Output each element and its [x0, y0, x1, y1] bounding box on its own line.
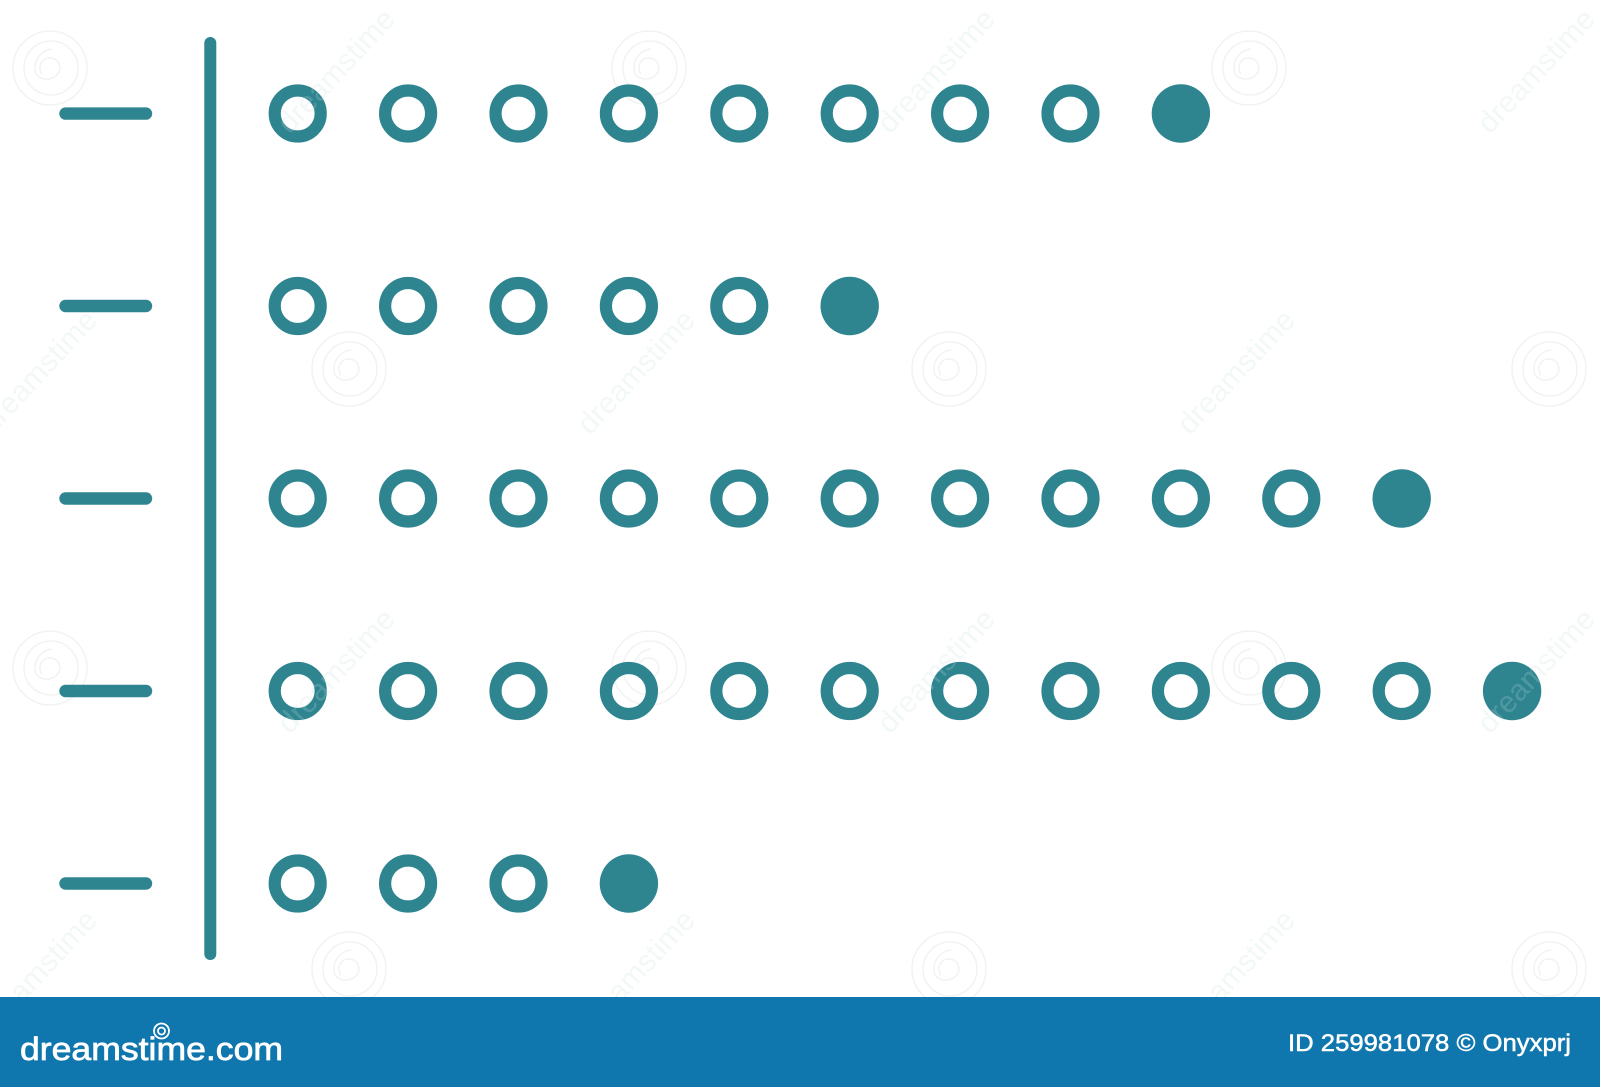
image ID and credit: ID 259981078 © Onyxprj [1288, 1030, 1571, 1057]
chart: dot plot [66, 43, 1541, 954]
footer banner [0, 997, 1600, 1087]
row 2: tick and dots [66, 277, 879, 335]
watermark text: dreamstime [871, 3, 1002, 140]
watermark text: dreamstime [271, 603, 402, 740]
watermark text: dreamstime [1471, 3, 1600, 140]
watermark text: dreamstime [1471, 603, 1600, 740]
row 5: tick and dots [66, 854, 658, 913]
watermark text: dreamstime [1171, 304, 1302, 441]
watermark text: dreamstime [271, 3, 402, 140]
watermark text: dreamstime [871, 603, 1002, 740]
row 3: tick and dots [66, 469, 1431, 528]
watermark text: dreamstime [571, 304, 702, 441]
row 1: tick and dots [66, 84, 1210, 143]
watermark text: dreamstime [1171, 904, 1302, 1041]
icon: logo spiral [154, 1024, 169, 1038]
vertical axis [204, 43, 216, 954]
row 4: tick and dots [66, 662, 1541, 720]
logo text: dreamstime.com [20, 1031, 283, 1067]
watermark text: dreamstime [571, 904, 702, 1041]
